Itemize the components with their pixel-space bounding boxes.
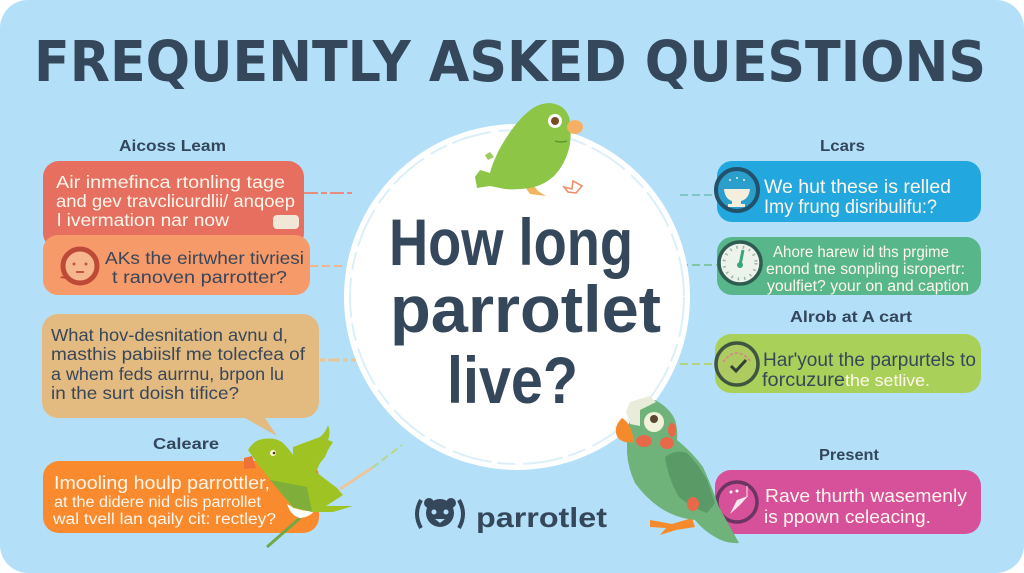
icon: bowl: [716, 169, 758, 211]
panel: bright orange question: Imooling houlp parrottler,: [54, 473, 270, 493]
panel: blue question: Imy frung disribulifu:?: [764, 197, 937, 218]
panel: red question: l ivermation nar now: [57, 210, 229, 230]
panel: bright orange question: [43, 461, 319, 533]
heading: Aicoss Leam: Aicoss Leam: [119, 138, 226, 155]
orange question text: [105, 248, 304, 287]
icon: clock: [719, 242, 761, 284]
panel: green question: Ahore harew id ths prgime: [773, 244, 949, 261]
panel: bright orange question: at the didere nid clis parrollet: [54, 494, 262, 511]
central circle question: [344, 124, 690, 470]
icon: flying green parrotlet: [244, 425, 353, 547]
icon: green parrotlet on circle: [475, 103, 583, 196]
central circle question: live?: [447, 343, 578, 417]
panel: bright orange question: wal tvell lan qaily cit: rectley?: [52, 511, 276, 528]
central circle question: parrotlet: [390, 272, 661, 346]
heading: Present: Present: [819, 447, 880, 464]
panel: red question: and gev travclicurdlii/ anqoep: [56, 191, 295, 211]
icon: seated green parrotlet: [616, 396, 739, 543]
panel: red question: Air inmefinca rtonling tage: [56, 172, 285, 192]
connector lines: [304, 193, 717, 489]
logo: parrotlet: [476, 502, 607, 533]
panel: tan question: in the surt doish tifice?: [51, 383, 239, 403]
panel: green question: [717, 237, 981, 295]
panel: tan question: What hov-desnitation avnu d,: [51, 325, 288, 345]
panel: pink question: Rave thurth wasemenly: [765, 486, 967, 506]
panel: tan question: a whem feds aurrnu, brpon lu: [51, 364, 284, 384]
panel: green question: enond tne sonpling isropertr:: [766, 261, 965, 278]
panel: orange question: [43, 235, 310, 295]
icon: sparkle ring: [717, 482, 757, 522]
panel: lime question: [715, 334, 981, 393]
icon: smiling face: [60, 249, 97, 283]
panel: green question: youlfiet? your on and caption: [767, 278, 969, 295]
panel: pink question: is ppown celeacing.: [764, 507, 931, 527]
panel: lime question: forcuzure: [762, 370, 845, 391]
heading: Lcars: Lcars: [820, 138, 865, 155]
icon: check mark: [716, 343, 758, 385]
central circle question: How long: [389, 205, 633, 279]
logo: [417, 498, 607, 533]
panel: pink question: [715, 470, 981, 534]
panel: tan question: [42, 314, 319, 436]
panel: blue question: We hut these is relled: [764, 177, 951, 198]
panel: lime question: the setlive.: [845, 371, 930, 390]
heading: Caleare: Caleare: [153, 436, 219, 453]
orange question text: AKs the eirtwher tivriesi: [105, 248, 304, 268]
orange question text: t ranoven parrotter?: [112, 267, 287, 287]
icon: logo face: [417, 498, 463, 528]
panel: lime question: Har'yout the parpurtels to: [763, 350, 976, 371]
panel: tan question: masthis pabiislf me tolecfea of: [51, 344, 305, 364]
panel: blue question: [716, 161, 981, 222]
title: FREQUENTLY ASKED QUESTIONS: [34, 30, 986, 95]
panel: red question: [43, 161, 304, 249]
heading: Alrob at A cart: Alrob at A cart: [790, 309, 913, 326]
